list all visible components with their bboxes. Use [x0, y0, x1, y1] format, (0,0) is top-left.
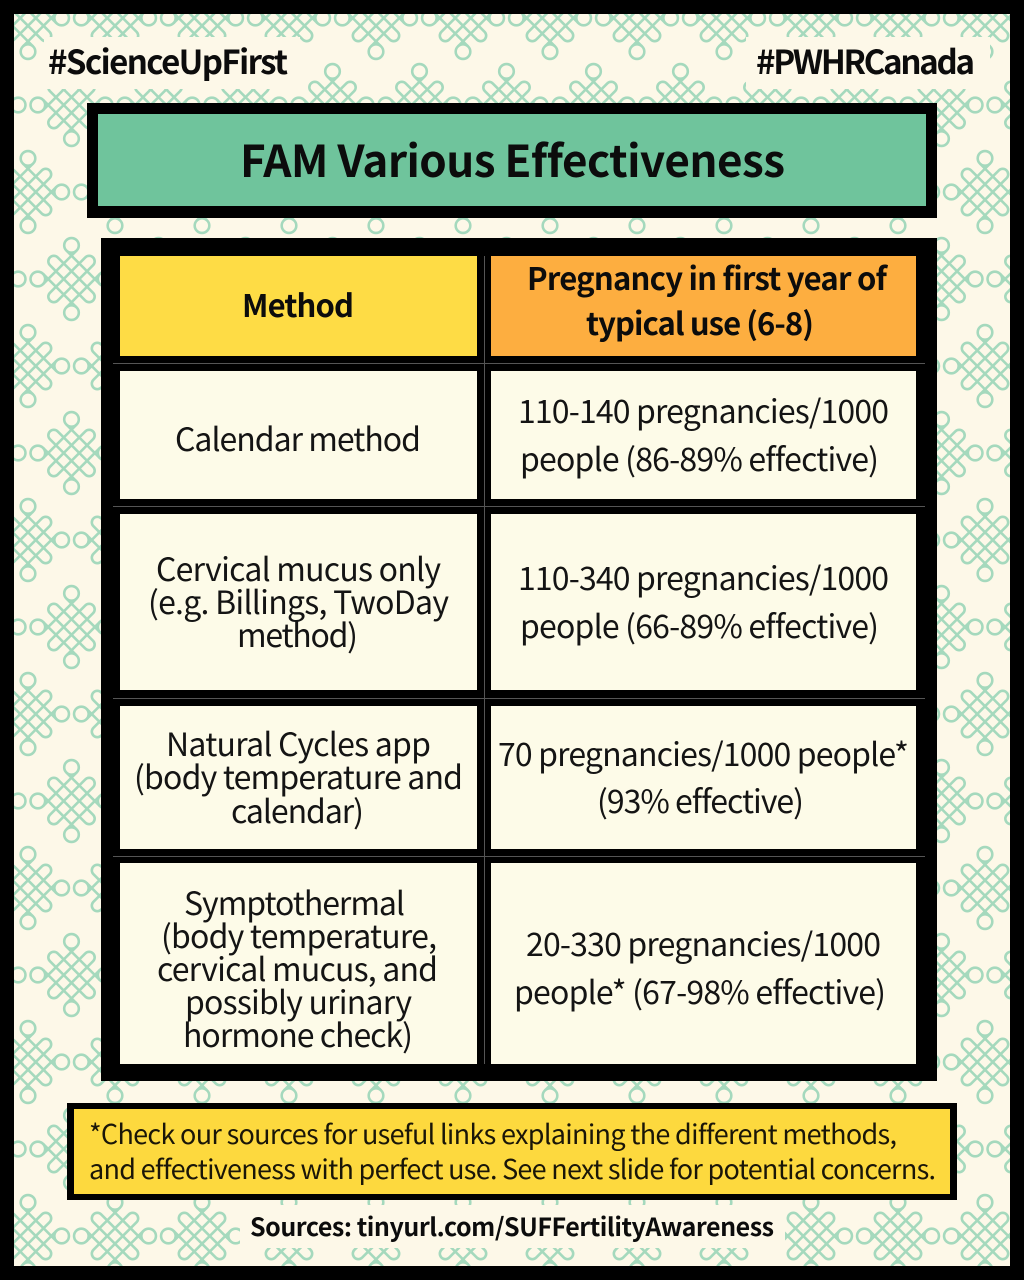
row value: Symptothermal: people* (67-98% effective): [514, 968, 886, 1014]
row: Natural Cycles app: [120, 706, 477, 849]
row value: Calendar method: 110-140 pregnancies/1000: [518, 387, 889, 433]
row: Natural Cycles app: (body temperature and: [134, 753, 463, 799]
row: Natural Cycles app: calendar): [231, 787, 364, 833]
header cell: Method: [120, 256, 477, 356]
row: Calendar method: [120, 371, 477, 499]
header cell: Pregnancy in first year: typical use (6-8): [586, 299, 814, 344]
row: Symptothermal: hormone check): [183, 1011, 413, 1057]
row value: Natural Cycles app: (93% effective): [597, 777, 804, 823]
row: Symptothermal: Symptothermal: [184, 879, 405, 925]
row value: Natural Cycles app: [491, 706, 916, 849]
header cell: Pregnancy in first year: Pregnancy in first year of: [527, 254, 888, 299]
title banner: FAM Various Effectiveness: [240, 126, 785, 190]
hashtag: PWHRCanada: #PWHRCanada: [756, 36, 975, 84]
row: Cervical mucus only: Cervical mucus only: [156, 545, 441, 591]
row: Symptothermal: [120, 863, 477, 1064]
sources line: Sources: tinyurl.com/SUFFertilityAwareness: [250, 1208, 774, 1244]
footnote callout: *Check our sources for useful links explaining the different methods,: [89, 1113, 897, 1152]
row: Symptothermal: possibly urinary: [185, 978, 412, 1024]
row value: Cervical mucus only: [491, 514, 916, 690]
row value: Symptothermal: 20-330 pregnancies/1000: [526, 920, 881, 966]
row value: Cervical mucus only: 110-340 pregnancies/1000: [518, 554, 889, 600]
effectiveness table: [101, 238, 937, 1081]
row: Symptothermal: cervical mucus, and: [157, 945, 438, 991]
row: Symptothermal: (body temperature,: [161, 912, 437, 958]
row: Calendar method: Calendar method: [175, 415, 421, 461]
header cell: Method: Method: [242, 281, 354, 326]
hashtag: ScienceUpFirst: #ScienceUpFirst: [48, 36, 288, 84]
header cell: Pregnancy in first year: [491, 254, 916, 356]
row value: Cervical mucus only: people (66-89% effective): [520, 602, 879, 648]
row: Cervical mucus only: (e.g. Billings, TwoDay: [148, 578, 449, 624]
title banner: [87, 103, 937, 218]
footnote callout: and effectiveness with perfect use. See next slide for potential concerns.: [89, 1148, 936, 1187]
footnote callout: [67, 1103, 957, 1200]
row: Cervical mucus only: [120, 514, 477, 690]
row value: Natural Cycles app: 70 pregnancies/1000 people*: [498, 730, 909, 776]
row value: Symptothermal: [491, 863, 916, 1064]
row: Natural Cycles app: Natural Cycles app: [166, 720, 431, 766]
row value: Calendar method: [491, 371, 916, 499]
row value: Calendar method: people (86-89% effective): [520, 435, 879, 481]
row: Cervical mucus only: method): [237, 611, 358, 657]
